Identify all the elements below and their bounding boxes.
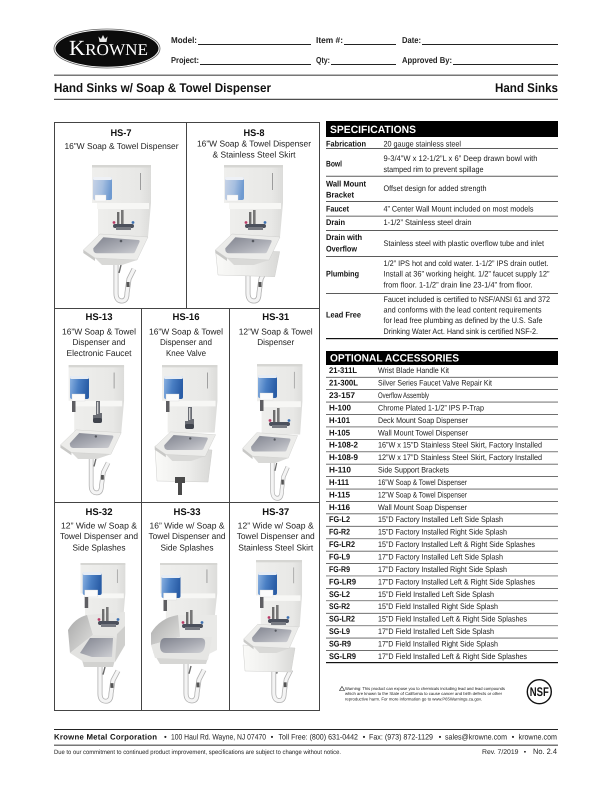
row FG-R9: 17”D Factory Installed Right Side Splash xyxy=(378,565,507,574)
row SG-L9 xyxy=(326,627,558,638)
row SG-LR2: SG-LR2 xyxy=(329,615,355,624)
panel: HS-33 xyxy=(148,507,226,701)
caption xyxy=(148,520,226,552)
spec: fabrication: Fabrication xyxy=(326,140,366,148)
caption: 16”W Soap & Towel Dispenser xyxy=(197,138,311,148)
row 21-300L xyxy=(326,379,558,390)
row SG-R2: 15”D Field Installed Right Side Splash xyxy=(378,602,498,611)
row H-101: H-101 xyxy=(329,416,350,425)
model name: HS-16 xyxy=(172,312,200,323)
spec: fabrication xyxy=(326,140,558,149)
spec: lead free: Faucet included is certified to NSF/ANSI 61 and 372 xyxy=(384,295,550,304)
footer company contact line: • xyxy=(164,732,167,741)
row FG-L2: FG-L2 xyxy=(329,515,350,524)
product image: sink with electronic faucet xyxy=(60,365,124,493)
spec: faucet: Faucet xyxy=(326,204,349,214)
row 21-311L: Wrist Blade Handle Kit xyxy=(378,366,450,375)
row SG-L9: SG-L9 xyxy=(329,627,350,636)
order form fields xyxy=(171,35,558,65)
footer company contact line: • xyxy=(271,732,274,741)
caption: 16” Wide w/ Soap & xyxy=(150,520,225,530)
product image: 12 inch sink with skirt xyxy=(243,560,302,701)
footer company contact line: 100 Haul Rd. Wayne, NJ 07470 xyxy=(171,732,267,741)
model name: HS-33 xyxy=(174,507,200,518)
footer company contact line: sales@krowne.com xyxy=(445,732,507,741)
caption: Towel Dispenser and xyxy=(60,531,138,541)
spec: plumbing: Install at 36” working height. 1/2” faucet supply 12” xyxy=(384,270,550,278)
row FG-LR9 xyxy=(326,577,558,589)
spec: drain xyxy=(326,218,558,231)
footer company contact line: • xyxy=(439,732,442,741)
row SG-LR9: 17”D Field Installed Left & Right Side Splashes xyxy=(378,652,527,661)
model name: HS-8 xyxy=(244,128,265,139)
warning notice xyxy=(340,686,505,701)
row FG-LR9: 17”D Factory Installed Left & Right Side Splashes xyxy=(378,577,535,586)
caption: 12” Wide w/ Soap & xyxy=(238,520,314,530)
row FG-LR9: FG-LR9 xyxy=(329,577,356,586)
spec: drain with overflow xyxy=(326,233,558,257)
footer company contact line: • xyxy=(512,732,515,741)
row FG-L9: FG-L9 xyxy=(329,552,350,562)
warning text: reproductive harm. For more information go to www.P65Warnings.ca.gov. xyxy=(345,696,482,701)
caption xyxy=(149,326,223,358)
caption: & Stainless Steel Skirt xyxy=(212,150,296,160)
specifications heading bar xyxy=(326,121,558,137)
row SG-L9: 17”D Field Installed Left Side Splash xyxy=(378,627,494,636)
row FG-R2: 15”D Factory Installed Right Side Splash xyxy=(378,528,507,537)
row H-108-2: H-108-2 xyxy=(329,441,358,450)
logo wordmark: KROWNE xyxy=(69,36,148,60)
model name: HS-31 xyxy=(262,312,290,323)
row H-115 xyxy=(326,490,558,502)
row H-111: H-111 xyxy=(329,478,349,487)
row H-110: H-110 xyxy=(329,466,351,475)
footer disclaimer: Due to our commitment to continued product improvement, specifications are subject to change without notice. xyxy=(54,749,341,756)
row H-100: H-100 xyxy=(329,404,351,412)
accessories heading bar xyxy=(326,351,558,365)
warning text: which are known to the State of California to cause cancer and birth defects or other xyxy=(345,691,503,696)
caption xyxy=(60,520,138,552)
field: quantity: Qty: xyxy=(316,55,330,65)
icon: warning triangle xyxy=(340,686,344,690)
row FG-LR2: FG-LR2 xyxy=(329,540,355,549)
row H-115: 12”W Soap & Towel Dispenser xyxy=(378,490,467,499)
caption: Towel Dispenser and xyxy=(237,531,315,541)
row SG-R9: SG-R9 xyxy=(329,639,351,648)
row 23-157: 23-157 xyxy=(329,391,355,400)
caption xyxy=(197,138,311,160)
category title: Hand Sinks xyxy=(495,81,558,95)
row H-115: H-115 xyxy=(329,490,350,499)
caption: Stainless Steel Skirt xyxy=(238,542,314,552)
spec: drain with overflow: Overflow xyxy=(326,244,358,254)
caption xyxy=(62,326,136,358)
spec: bowl xyxy=(326,154,558,177)
row FG-R2: FG-R2 xyxy=(329,528,350,537)
caption: 12”W Soap & Towel xyxy=(239,326,313,336)
logo crown xyxy=(98,35,108,42)
footer company contact line xyxy=(54,732,557,741)
row SG-L2 xyxy=(326,590,558,601)
row FG-L9: 17”D Factory Installed Left Side Splash xyxy=(378,552,503,562)
row H-108-2: 16”W x 15”D Stainless Steel Skirt, Factory Installed xyxy=(378,441,542,450)
field: item number: Item #: xyxy=(316,35,343,45)
panel: HS-37 xyxy=(237,507,315,701)
spec: bowl: stamped rim to prevent spillage xyxy=(384,165,484,174)
model name: HS-7 xyxy=(110,128,132,139)
row H-100: Chrome Plated 1-1/2” IPS P-Trap xyxy=(378,404,484,412)
caption: Electronic Faucet xyxy=(66,348,132,358)
panel: HS-16 xyxy=(149,312,223,495)
panel: specifications xyxy=(326,121,558,339)
spec: bowl: Bowl xyxy=(326,160,342,168)
caption: Side Splashes xyxy=(72,542,126,552)
row 21-311L xyxy=(326,366,558,378)
spec: faucet xyxy=(326,204,558,217)
spec: lead free: Drinking Water Act. Hand sink is certified NSF-2. xyxy=(384,327,538,336)
row H-108-9: H-108-9 xyxy=(329,453,358,462)
row 21-300L: Silver Series Faucet Valve Repair Kit xyxy=(378,379,493,388)
icon: NSF certification mark xyxy=(527,680,551,704)
caption: 16”W Soap & Towel xyxy=(149,326,223,336)
row SG-L2: SG-L2 xyxy=(329,590,350,599)
row H-108-9: 12”W x 17”D Stainless Steel Skirt, Factory Installed xyxy=(378,453,542,462)
row FG-LR2: 15”D Factory Installed Left & Right Side Splashes xyxy=(378,540,535,549)
field: model xyxy=(171,35,311,45)
row SG-LR9 xyxy=(326,652,558,663)
panel: HS-7 xyxy=(64,128,179,301)
row FG-L2 xyxy=(326,515,558,527)
footer revision and page number: • xyxy=(524,749,527,756)
panel: HS-31 xyxy=(239,312,313,498)
row H-116: Wall Mount Soap Dispenser xyxy=(378,503,467,512)
footer revision and page number: Rev. 7/2019 xyxy=(482,749,519,756)
caption: Dispenser xyxy=(257,337,294,347)
panel: optional accessories xyxy=(326,351,558,663)
spec: wall mount bracket: Offset design for added strength xyxy=(384,184,486,193)
caption: 12” Wide w/ Soap & xyxy=(61,520,137,530)
spec: plumbing: Plumbing xyxy=(326,270,359,278)
model name: HS-32 xyxy=(86,507,112,518)
row SG-R9 xyxy=(326,639,558,651)
field: item number xyxy=(316,35,396,45)
product image: sink with knee valve xyxy=(155,365,217,495)
row H-100 xyxy=(326,404,558,415)
knee valve xyxy=(175,477,185,495)
row H-111 xyxy=(326,478,558,489)
row 21-311L: 21-311L xyxy=(329,366,357,375)
row SG-LR2: 15”D Field Installed Left & Right Side Splashes xyxy=(378,615,527,624)
row FG-R9 xyxy=(326,565,558,576)
field: date: Date: xyxy=(402,35,421,45)
row H-116: H-116 xyxy=(329,503,350,512)
icon: NSF certification mark: NSF xyxy=(530,685,549,699)
product image: sink with skirt xyxy=(215,165,283,301)
footer company contact line: Toll Free: (800) 631-0442 xyxy=(278,732,358,741)
specifications heading bar: SPECIFICATIONS xyxy=(330,124,416,136)
spec: drain with overflow: Stainless steel with plastic overflow tube and inlet xyxy=(384,239,545,248)
caption: Dispenser and xyxy=(72,337,126,347)
row H-105: H-105 xyxy=(329,428,350,437)
field: project: Project: xyxy=(171,55,199,65)
warning text xyxy=(345,686,505,701)
panel: HS-8 xyxy=(197,128,311,301)
footer company contact line: Krowne Metal Corporation xyxy=(54,732,157,741)
field: project xyxy=(171,55,311,65)
footer revision and page number xyxy=(482,747,558,756)
row 21-300L: 21-300L xyxy=(329,379,358,388)
product image: 16 inch sink with side splashes xyxy=(151,563,217,701)
row H-105: Wall Mount Towel Dispenser xyxy=(378,428,468,437)
spec: wall mount bracket: Wall Mount xyxy=(326,180,366,188)
spec: drain: 1-1/2” Stainless steel drain xyxy=(384,218,472,227)
row 23-157 xyxy=(326,391,558,402)
caption: Side Splashes xyxy=(160,542,214,552)
spec: bowl: 9-3/4”W x 12-1/2”L x 6” Deep drawn bowl with xyxy=(384,154,538,163)
footer revision and page number: No. 2.4 xyxy=(533,747,558,756)
row SG-LR9: SG-LR9 xyxy=(329,652,356,661)
panel: HS-13 xyxy=(60,312,136,493)
caption: 16”W Soap & Towel Dispenser xyxy=(64,141,179,151)
row 23-157: Overflow Assembly xyxy=(378,391,429,400)
accessories heading bar: OPTIONAL ACCESSORIES xyxy=(330,353,459,365)
row SG-R9: 17”D Field Installed Right Side Splash xyxy=(378,639,498,648)
footer company contact line: • xyxy=(363,732,366,741)
product grid frame xyxy=(54,122,320,710)
spec: drain with overflow: Drain with xyxy=(326,233,362,242)
row FG-L2: 15”D Factory Installed Left Side Splash xyxy=(378,515,503,524)
row FG-L9 xyxy=(326,552,558,564)
product image: 12 inch sink with side splashes xyxy=(68,563,125,701)
caption: Towel Dispenser and xyxy=(148,531,226,541)
spec: faucet: 4” Center Wall Mount included on most models xyxy=(384,204,534,214)
product image: sink xyxy=(83,165,151,301)
spec: plumbing: 1/2” IPS hot and cold water. 1-1/2” IPS drain outlet. xyxy=(384,259,548,268)
row H-108-2 xyxy=(326,441,558,452)
field: model: Model: xyxy=(171,35,197,45)
field: approved by: Approved By: xyxy=(402,55,452,65)
caption xyxy=(239,326,313,347)
model name: HS-13 xyxy=(86,312,112,323)
row H-116 xyxy=(326,503,558,514)
row SG-R2: SG-R2 xyxy=(329,602,350,611)
caption: Dispenser and xyxy=(160,337,212,347)
row SG-L2: 15”D Field Installed Left Side Splash xyxy=(378,590,494,599)
row H-110 xyxy=(326,466,558,477)
spec: plumbing: from floor. 1-1/2” drain line 23-1/4” from floor. xyxy=(384,280,532,290)
spec: lead free xyxy=(326,295,558,339)
warning text: Warning: This product can expose you to chemicals including lead and lead compounds xyxy=(345,686,505,691)
row FG-LR2 xyxy=(326,540,558,552)
caption: Knee Valve xyxy=(166,348,206,358)
spec: wall mount bracket: Bracket xyxy=(326,190,354,200)
row H-110: Side Support Brackets xyxy=(378,466,449,475)
caption xyxy=(237,520,315,552)
product image: 12 inch sink xyxy=(243,364,302,498)
footer company contact line: krowne.com xyxy=(518,732,557,741)
row H-101: Deck Mount Soap Dispenser xyxy=(378,416,468,425)
page title: Hand Sinks w/ Soap & Towel Dispenser xyxy=(54,81,271,95)
caption: 16”W Soap & Towel xyxy=(62,326,136,336)
panel: HS-32 xyxy=(60,507,138,701)
spec: drain: Drain xyxy=(326,218,345,227)
row FG-R2 xyxy=(326,528,558,539)
spec: lead free: Lead Free xyxy=(326,310,361,320)
spec: fabrication: 20 gauge stainless steel xyxy=(384,140,461,148)
row H-108-9 xyxy=(326,453,558,464)
row SG-R2 xyxy=(326,602,558,614)
model name: HS-37 xyxy=(262,507,289,518)
footer company contact line: Fax: (973) 872-1129 xyxy=(369,732,433,741)
spec: wall mount bracket xyxy=(326,180,558,202)
row H-111: 16”W Soap & Towel Dispenser xyxy=(378,478,467,487)
field: quantity xyxy=(316,55,396,65)
spec: lead free: and conforms with the lead content requirements xyxy=(384,306,542,314)
spec: lead free: for lead free plumbing as defined by the U.S. Safe xyxy=(384,316,543,325)
header logo: Krowne xyxy=(54,29,160,68)
row H-105 xyxy=(326,428,558,440)
spec: plumbing xyxy=(326,259,558,294)
row FG-R9: FG-R9 xyxy=(329,565,350,574)
row SG-LR2 xyxy=(326,615,558,626)
row H-101 xyxy=(326,416,558,428)
